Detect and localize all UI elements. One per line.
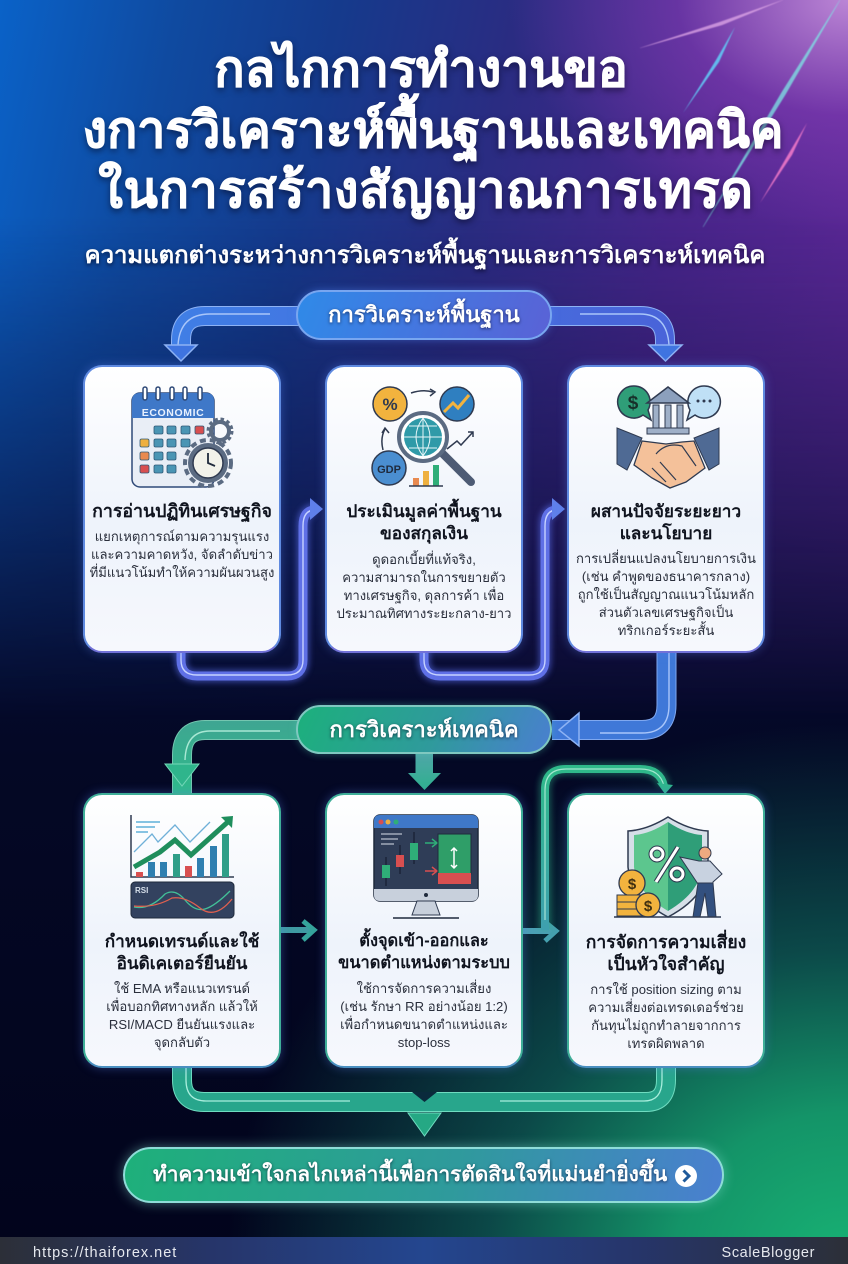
text: จุดกลับตัว — [154, 1035, 210, 1050]
arrows: first row connectors — [181, 498, 565, 676]
text: (เช่น รักษา RR อย่างน้อย 1:2) — [340, 999, 508, 1014]
icon: magnifier, globe, GDP: % — [382, 395, 398, 414]
text: การใช้ position sizing ตาม — [590, 982, 742, 997]
icon: trading monitor — [373, 814, 479, 919]
decorative light rays — [640, 0, 840, 228]
icon: chevron circle — [675, 1165, 697, 1187]
text: RSI/MACD ยืนยันแรงและ — [109, 1017, 255, 1032]
arrows: technical header to cards — [165, 730, 441, 793]
text: ทริกเกอร์ระยะสั้น — [618, 623, 714, 638]
panel: entry, exit and position size — [325, 793, 523, 1068]
text: เพื่อกำหนดขนาดตำแหน่งและ — [340, 1017, 508, 1032]
text: ใช้การจัดการความเสี่ยง — [357, 981, 491, 996]
text — [90, 529, 274, 580]
text: ประมาณทิศทางระยะกลาง-ยาว — [336, 606, 512, 621]
text: การเปลี่ยนแปลงนโยบายการเงิน — [576, 551, 756, 566]
heading: ผสานปัจจัยระยะยาว — [591, 501, 741, 521]
text: ความเสี่ยงต่อเทรดเดอร์ช่วย — [588, 1000, 744, 1015]
icon: bank and handshake — [616, 385, 722, 489]
text: กันทุนไม่ถูกทำลายจากการ — [591, 1018, 741, 1033]
icon: magnifier, globe, GDP: GDP — [377, 464, 401, 476]
text — [576, 550, 756, 638]
conclusion banner — [123, 1147, 724, 1203]
text: ทางเศรษฐกิจ, ดุลการค้า เพื่อ — [344, 588, 504, 603]
icon: trend chart and RSI — [130, 815, 234, 918]
heading: ขนาดตำแหน่งตามระบบ — [338, 954, 510, 972]
arrow: merge bracket to conclusion — [182, 1068, 666, 1136]
icon: calendar and clock gear — [131, 386, 234, 488]
arrow: third card to technical header — [552, 653, 669, 746]
text: ใช้ EMA หรือแนวเทรนด์ — [114, 981, 250, 996]
panel: economic calendar — [83, 365, 281, 653]
heading: การจัดการความเสี่ยง — [586, 932, 746, 952]
text: (เช่น คำพูดของธนาคารกลาง) — [582, 569, 750, 584]
title: งการวิเคราะห์พื้นฐานและเทคนิค — [83, 102, 783, 158]
text: แยกเหตุการณ์ตามความรุนแรง — [95, 529, 269, 544]
arrows: fundamental header to first and third cards — [165, 314, 682, 361]
panel: currency valuation — [325, 365, 523, 653]
background top tint — [0, 0, 848, 720]
icon: shield, coins and person — [614, 816, 723, 918]
footer brand: ScaleBlogger — [722, 1245, 815, 1261]
text: ส่วนตัวเลขเศรษฐกิจเป็น — [599, 605, 733, 620]
heading: ประเมินมูลค่าพื้นฐาน — [346, 501, 502, 521]
icon: shield, coins and person: $ — [628, 876, 637, 893]
text — [106, 981, 258, 1050]
footer bar — [0, 1237, 848, 1264]
header pill: technical analysis — [296, 705, 552, 754]
text: ความสามารถในการขยายตัว — [342, 570, 506, 585]
footer url: https://thaiforex.net — [33, 1245, 177, 1261]
text: stop-loss — [398, 1035, 450, 1050]
banner text: ทำความเข้าใจกลไกเหล่านี้เพื่อการตัดสินใจที่แม่นยำยิ่งขึ้น — [153, 1163, 667, 1186]
arrows: second row connectors — [281, 769, 673, 941]
panel: trend and indicators — [83, 793, 281, 1068]
heading: อินดิเคเตอร์ยืนยัน — [117, 953, 247, 973]
heading: ตั้งจุดเข้า-ออกและ — [359, 932, 489, 950]
text: ที่มีแนวโน้มทำให้ความผันผวนสูง — [90, 565, 274, 580]
icon: shield, coins and person: $ — [644, 898, 653, 915]
text: เพื่อบอกทิศทางหลัก แล้วให้ — [106, 999, 258, 1014]
text — [588, 982, 744, 1051]
panel: risk management — [567, 793, 765, 1068]
heading: ของสกุลเงิน — [380, 523, 468, 543]
title — [82, 40, 784, 226]
icon: magnifier, globe, GDP — [371, 386, 475, 487]
icon: bank and handshake: $ — [628, 393, 639, 414]
header pill: technical analysis: การวิเคราะห์เทคนิค — [329, 717, 519, 742]
text: ดูดอกเบี้ยที่แท้จริง, — [372, 552, 476, 567]
heading: การอ่านปฏิทินเศรษฐกิจ — [92, 501, 272, 521]
text — [336, 550, 512, 621]
panel: long-term factors and policy — [567, 365, 765, 653]
heading — [586, 930, 746, 974]
text: เทรดผิดพลาด — [627, 1036, 705, 1051]
title: กลไกการทำงานขอ — [214, 41, 628, 97]
text — [340, 980, 508, 1050]
header pill: fundamental analysis: การวิเคราะห์พื้นฐาน — [328, 302, 520, 327]
background corner glow — [448, 0, 848, 300]
subtitle: ความแตกต่างระหว่างการวิเคราะห์พื้นฐานและการวิเคราะห์เทคนิค — [85, 242, 765, 269]
heading — [338, 928, 510, 972]
heading: เป็นหัวใจสำคัญ — [608, 954, 724, 974]
title: ในการสร้างสัญญาณการเทรด — [98, 162, 754, 218]
icon: trend chart and RSI: RSI — [135, 886, 148, 895]
text: และความคาดหวัง, จัดลำดับข่าว — [91, 547, 273, 562]
heading: และนโยบาย — [620, 523, 712, 543]
header pill: fundamental analysis — [296, 290, 552, 340]
text: ถูกใช้เป็นสัญญาณแนวโน้มหลัก — [578, 587, 754, 602]
heading — [591, 501, 741, 543]
icon: calendar and clock gear: ECONOMIC — [142, 407, 204, 419]
heading: กำหนดเทรนด์และใช้ — [105, 931, 259, 951]
heading — [346, 498, 502, 544]
heading — [105, 931, 259, 973]
